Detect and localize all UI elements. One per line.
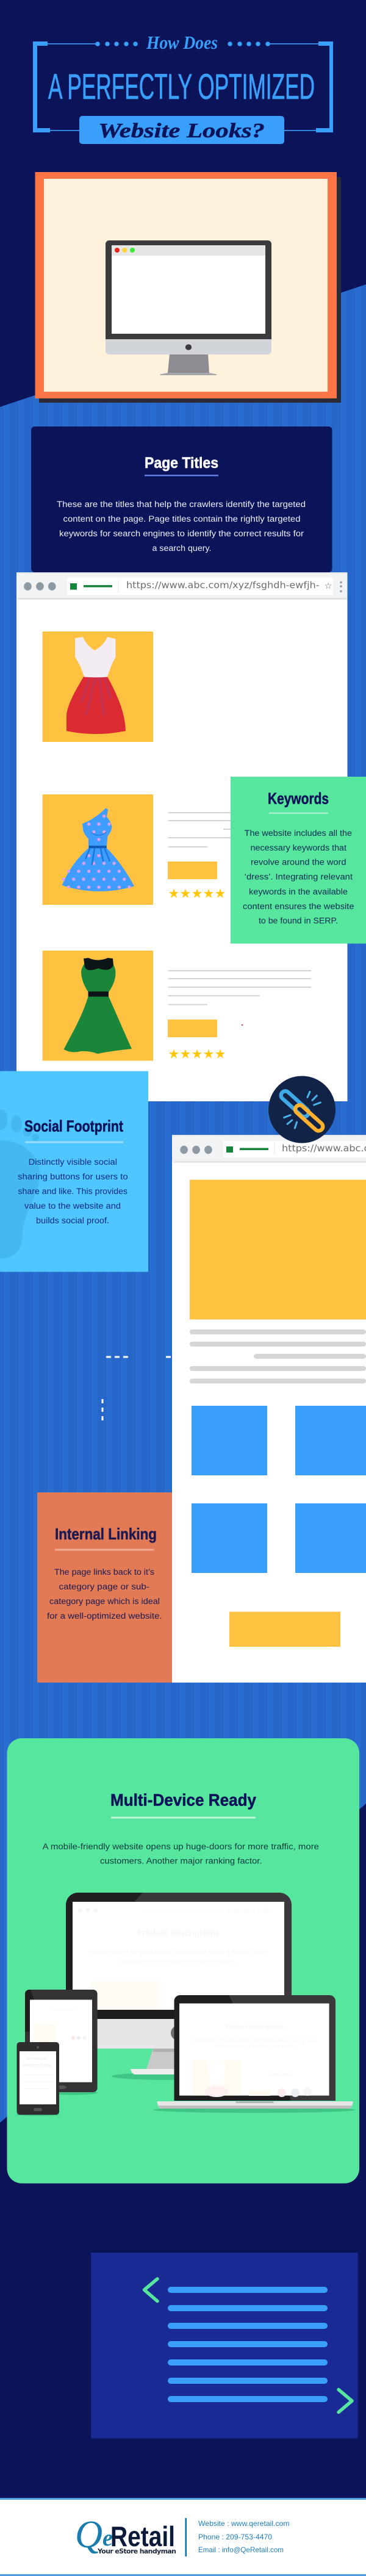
product card: green dress [43, 951, 153, 1060]
browser toolbar [172, 1135, 366, 1163]
panel: multi-device ready [7, 1738, 359, 2183]
faint laptop screen content: What Does [270, 2073, 293, 2078]
hero image placeholder [190, 1180, 366, 1320]
logo: QeRetail [75, 2513, 176, 2556]
green dress rating stars: ★★★★★ [168, 1047, 226, 1062]
title line: how does: How Does [146, 32, 218, 53]
icon: desktop monitor [106, 240, 271, 375]
faint phone screen content: Product [27, 2056, 46, 2061]
text block: internal linking description: category page which is ideal [49, 1597, 160, 1606]
blue dress button [168, 862, 217, 879]
panel: internal linking [37, 1492, 172, 1683]
text block: social footprint description [18, 1157, 128, 1225]
icon: desktop computer [66, 1893, 292, 2080]
faint phone screen content [22, 2056, 54, 2089]
logo: QeRetail: Q [75, 2513, 102, 2556]
text block: social footprint description: share and like. This provides [18, 1187, 127, 1196]
text block: keywords description: ‘dress’. Integrating relevant [245, 872, 353, 881]
text block: page titles description [57, 500, 306, 553]
blue dress listing lines [168, 812, 232, 847]
text block: keywords description: The website includes all the [245, 829, 352, 838]
text block: keywords description: to be found in SERP. [259, 916, 338, 925]
logo: QeRetail: e [102, 2525, 113, 2551]
text block: internal linking description: for a well-optimized website. [47, 1611, 162, 1621]
text block: keywords description: content ensures the website [243, 902, 354, 911]
product card: red dress [43, 631, 153, 742]
text block: internal linking description: category page or sub- [59, 1582, 149, 1591]
green dress listing lines [168, 970, 311, 1006]
text block: page titles description: a search query. [152, 544, 211, 553]
text block: social footprint description: value to the website and [24, 1201, 121, 1211]
text block: social footprint description: sharing buttons for users to [18, 1172, 128, 1181]
heading: internal linking: Internal Linking [55, 1525, 157, 1543]
faint laptop screen content: Product descriptions [225, 2024, 284, 2031]
text block: page titles description: These are the titles that help the crawlers identify the targeted [57, 500, 306, 509]
text block: social footprint description: Distinctly visible social [29, 1157, 117, 1167]
panel: social footprint [0, 1071, 148, 1272]
faint tablet screen content [34, 2008, 87, 2049]
panel: pagination [91, 2253, 358, 2438]
text block: internal linking description [47, 1567, 162, 1621]
icon: right chevron [339, 2389, 352, 2412]
contact details [198, 2519, 289, 2554]
contact details: Email : info@QeRetail.com [198, 2545, 284, 2554]
title line: website looks: Website Looks? [98, 120, 265, 142]
text block: keywords description: keywords in the available [249, 887, 348, 896]
heading: social footprint: Social Footprint [24, 1117, 123, 1135]
faint screen content: https://www.abc.com/xyz/fsghdh-ewfjh- [143, 1908, 273, 1914]
text block: page titles description: keywords for search engines to identify the correct results for [59, 529, 304, 538]
text placeholder bars [168, 2287, 328, 2402]
icon: footprint watermark [0, 1109, 40, 1259]
browser toolbar: https://www.abc.com/xyz/fsghdh-ewfjh- [126, 580, 320, 591]
contact details: Phone : 209-753-4470 [198, 2533, 272, 2541]
title pill [79, 116, 284, 144]
panel: page titles [31, 426, 332, 572]
title bracket frame [33, 41, 333, 132]
icon: tablet [25, 1990, 98, 2095]
browser toolbar [16, 572, 348, 600]
faint tablet screen content: Product descriptions [49, 2008, 74, 2012]
logo: QeRetail: Your eStore handyman [97, 2547, 176, 2555]
icon: phone [16, 2042, 60, 2116]
browser toolbar: ☆ [325, 581, 332, 591]
faint screen content [78, 1908, 273, 2010]
text block: multi-device description: customers. Another major ranking factor. [100, 1856, 262, 1866]
panel: hero monitor [35, 172, 341, 403]
panel: product listing browser [16, 572, 348, 1101]
icon: broken chain link [268, 1076, 336, 1143]
footer [0, 2498, 366, 2576]
call to action button [229, 1612, 340, 1647]
faint screen content: and search bots to match their search results. [121, 1959, 235, 1965]
faint phone screen content: descriptions [23, 2063, 52, 2068]
logo: QeRetail: Retail [110, 2520, 175, 2552]
text block: multi-device description: A mobile-friendly website opens up huge-doors for more traffic, more [43, 1842, 319, 1851]
text block: keywords description: necessary keywords that [251, 843, 346, 852]
category tiles [192, 1406, 366, 1573]
faint screen content: In-depth and to the point product descriptions makes it easy for users [90, 1949, 267, 1955]
icon: laptop [153, 1995, 356, 2113]
dashed connector [101, 1356, 171, 1420]
divider [185, 2518, 187, 2556]
text block: multi-device description [43, 1842, 319, 1866]
heading: page titles: Page Titles [145, 455, 218, 472]
text block: page titles description: content on the page. Page titles contain the rightly targeted [63, 514, 300, 523]
contact details: Website : www.qeretail.com [198, 2519, 289, 2528]
text block: keywords description: revolve around the word [251, 858, 346, 866]
panel: keywords [231, 777, 366, 943]
green dress button [168, 1020, 217, 1037]
faint laptop screen content: and search bots to match their search results. [214, 2045, 295, 2049]
faint laptop screen content: In-depth and to the point product descriptions makes it easy for users [192, 2038, 317, 2043]
panel: internal linking browser [172, 1135, 366, 1683]
blue dress rating stars: ★★★★★ [168, 886, 226, 901]
icon: left chevron [144, 2279, 157, 2301]
text placeholder lines [190, 1329, 366, 1384]
title [33, 32, 333, 144]
heading: keywords: Keywords [268, 790, 329, 808]
text block: internal linking description: The page links back to it’s [54, 1567, 154, 1577]
product card: blue dress [43, 794, 153, 905]
text block: social footprint description: builds social proof. [36, 1216, 109, 1225]
heading: multi-device ready: Multi-Device Ready [110, 1790, 256, 1810]
text block: keywords description [243, 829, 354, 925]
faint laptop screen content [192, 2024, 317, 2097]
faint screen content: Product descriptions [137, 1927, 220, 1938]
